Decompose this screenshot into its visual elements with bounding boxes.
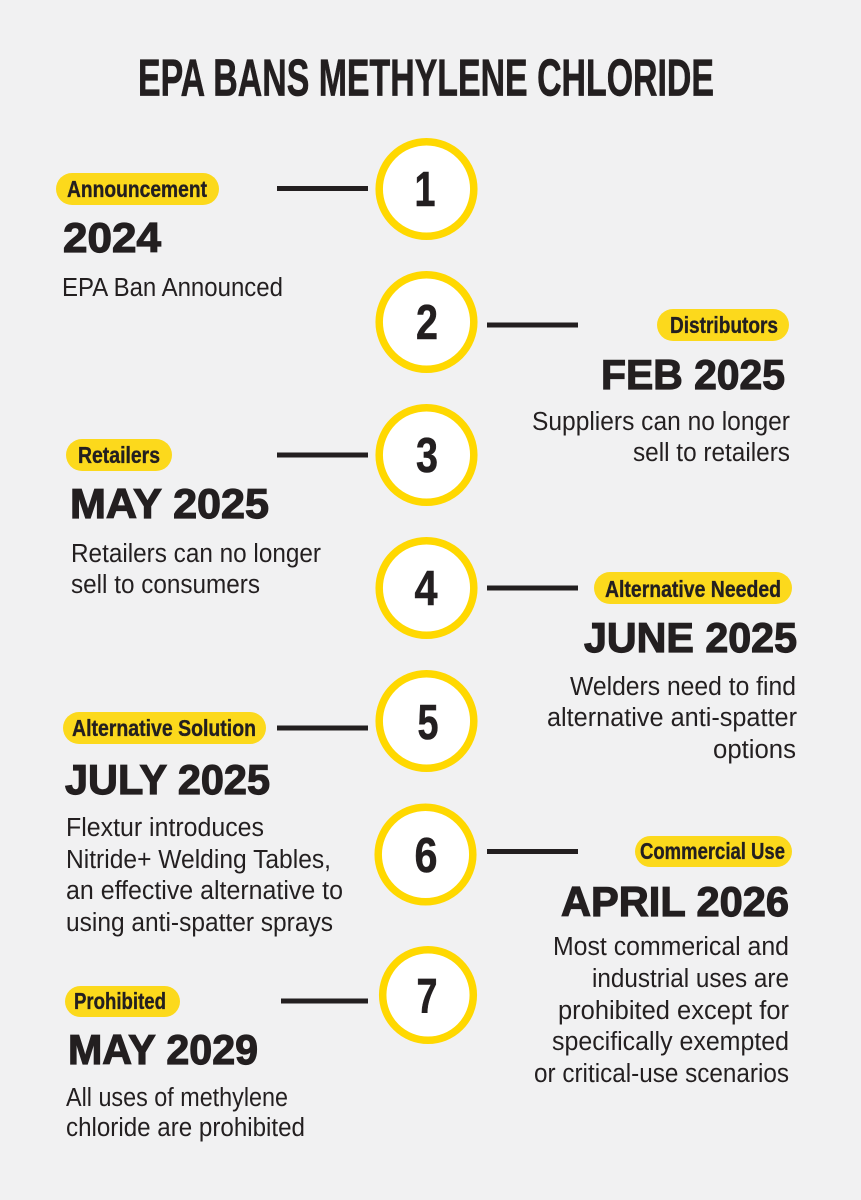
description 6: specifically exempted — [552, 1028, 789, 1056]
tag: Commercial Use: Commercial Use — [640, 838, 785, 864]
description 3 — [71, 540, 321, 599]
description 4: Welders need to find — [570, 673, 796, 701]
description 5 — [66, 814, 343, 937]
connector line 1 — [277, 186, 368, 191]
step 4: June 2025 alternative needed — [379, 541, 797, 764]
date: July 2025: JULY 2025 — [65, 756, 270, 803]
description 6 — [534, 933, 790, 1088]
tag: Prohibited: Prohibited — [74, 988, 166, 1014]
description 5: Flextur introduces — [66, 814, 264, 842]
connector line 4 — [487, 586, 578, 590]
description 6: Most commerical and — [553, 933, 789, 961]
connector line 6 — [487, 849, 578, 854]
number circle 5 — [379, 674, 474, 768]
description 5: an effective alternative to — [66, 877, 343, 905]
description 4: options — [713, 736, 796, 764]
connector line 2 — [487, 322, 578, 328]
description 2: Suppliers can no longer — [532, 408, 790, 436]
description 6: or critical-use scenarios — [534, 1060, 789, 1088]
date: April 2026: APRIL 2026 — [561, 878, 789, 925]
number circle 6: 6 — [414, 829, 438, 883]
description 5: Nitride+ Welding Tables, — [66, 846, 331, 874]
description 1: EPA Ban Announced — [62, 274, 283, 302]
date: June 2025: JUNE 2025 — [584, 614, 797, 661]
step 6: April 2026 commercial use — [378, 807, 792, 1088]
number circle 4: 4 — [414, 562, 438, 616]
tag: Retailers: Retailers — [78, 442, 160, 468]
description 7: chloride are prohibited — [66, 1114, 305, 1142]
number circle 7 — [383, 950, 473, 1040]
connector line 3 — [277, 452, 368, 458]
description 2 — [532, 408, 790, 467]
description 6: industrial uses are — [592, 965, 789, 993]
description 6: prohibited except for — [558, 997, 790, 1025]
number circle 1 — [379, 142, 474, 236]
description 2: sell to retailers — [633, 439, 790, 467]
tag: Alternative Solution: Alternative Solution — [72, 715, 256, 741]
description 3: sell to consumers — [71, 571, 260, 599]
step 2: Feb 2025 distributors — [379, 275, 790, 467]
description 5: using anti-spatter sprays — [66, 909, 333, 937]
tag: Announcement: Announcement — [67, 176, 207, 202]
step 3: May 2025 retailers — [66, 408, 474, 599]
number circle 3: 3 — [416, 429, 438, 483]
step 1: 2024 announcement — [56, 142, 474, 302]
number circle 3 — [379, 408, 474, 502]
step 7: May 2029 prohibited — [65, 950, 473, 1142]
description 4: alternative anti-spatter — [547, 704, 797, 732]
date: 2024: 2024 — [63, 214, 162, 261]
date: May 2029: MAY 2029 — [68, 1026, 258, 1073]
number circle 4 — [379, 541, 474, 635]
date: May 2025: MAY 2025 — [70, 480, 269, 527]
connector line 5 — [277, 726, 368, 730]
number circle 5: 5 — [418, 696, 438, 750]
tag: Distributors — [657, 309, 789, 341]
description 4 — [547, 673, 797, 764]
description 7 — [66, 1084, 305, 1142]
tag: Distributors: Distributors — [670, 312, 778, 338]
number circle 2: 2 — [416, 296, 438, 350]
number circle 1: 1 — [414, 163, 436, 217]
connector line 7 — [281, 998, 368, 1004]
tag: Alternative Needed: Alternative Needed — [605, 576, 781, 602]
number circle 7: 7 — [416, 970, 438, 1024]
description 3: Retailers can no longer — [71, 540, 321, 568]
description 7: All uses of methylene — [66, 1084, 288, 1112]
step 5: July 2025 alternative solution — [63, 674, 474, 937]
number circle 6 — [378, 807, 473, 902]
number circle 2 — [379, 275, 474, 369]
date: Feb 2025: FEB 2025 — [601, 351, 785, 398]
